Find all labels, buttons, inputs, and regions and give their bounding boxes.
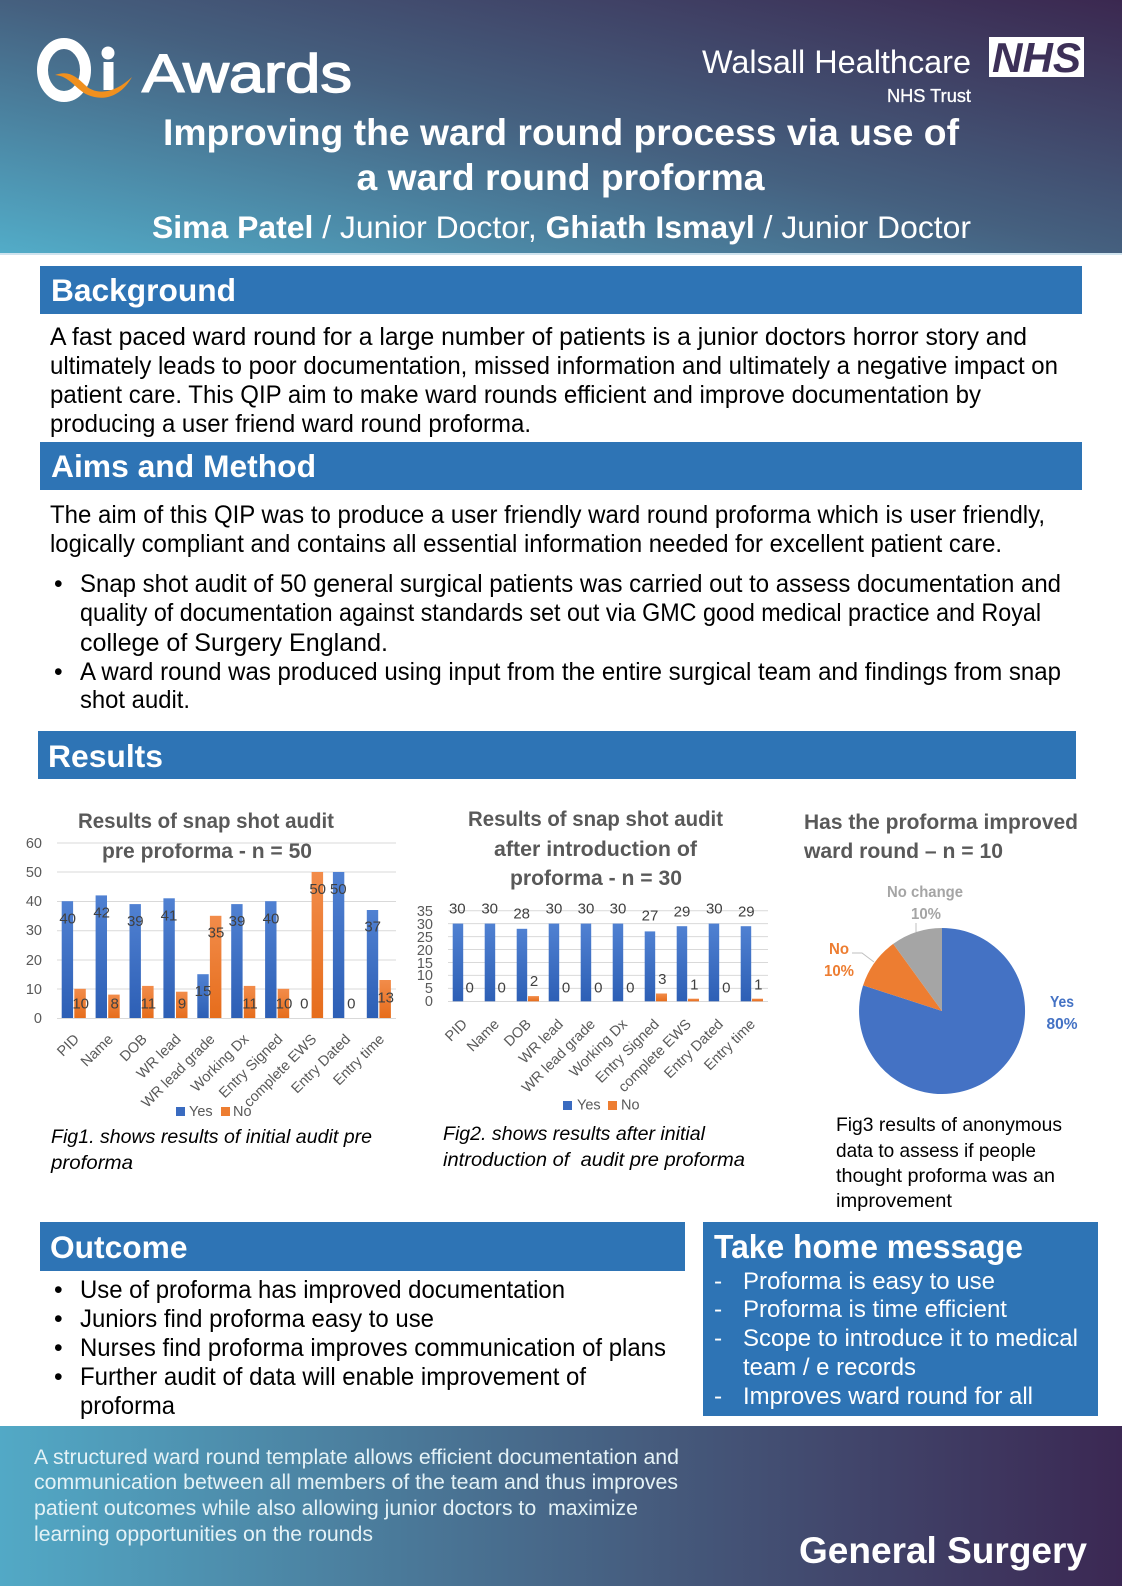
heading: take home message: Take home message [714,1228,1023,1265]
caption: fig 1: Fig1. shows results of initial audit pre [51,1126,372,1148]
caption: fig 3: improvement [836,1190,953,1212]
data labels: 0 [626,979,634,996]
data labels: 29 [738,904,755,921]
text: aims: The aim of this QIP was to produce a user friendly ward round proforma which is user friendly, [50,502,1045,529]
category labels: Name [78,1032,117,1070]
label: yes: Yes [1050,994,1074,1011]
chart title [468,808,723,890]
y axis labels [26,836,42,1027]
heading: background [40,266,1082,314]
bullet list: outcome [54,1277,666,1420]
chart title: Has the proforma improved [804,811,1078,834]
data labels: 2 [530,973,538,990]
y axis labels: 30 [417,917,433,933]
category labels: complete EWS [616,1017,695,1096]
title: a ward round proforma [356,156,765,198]
data labels: 8 [111,995,119,1012]
data labels: 41 [161,908,177,925]
bullet list: method: quality of documentation against standards set out via GMC good medical practice and Royal [80,600,1041,627]
bullet list: outcome: Juniors find proforma easy to use [80,1306,434,1333]
data labels [449,900,762,996]
bars: yes [62,872,378,1018]
data labels: 39 [229,913,245,930]
data labels: 35 [208,924,224,941]
y axis labels: 0 [34,1011,42,1027]
category labels: DOB [501,1017,535,1050]
data labels: 11 [141,995,156,1012]
footer banner [0,1426,1122,1586]
bullet list: outcome: • [54,1335,63,1362]
chart title: Results of snap shot audit [78,810,334,833]
label: yes: 80% [1046,1016,1078,1033]
text: background: patient care. This QIP aim to make ward rounds efficient and improve documentation by [50,382,982,409]
data labels: 3 [658,971,666,988]
text: background [50,324,1058,438]
bar chart: after proforma [417,808,768,1114]
caption: fig 3: data to assess if people [836,1140,1036,1162]
y axis labels: 20 [26,953,42,969]
caption: fig 1 [50,1126,372,1174]
caption: fig 3: Fig3 results of anonymous [836,1114,1062,1136]
data labels: 10 [276,995,292,1012]
list: take home points [714,1268,1078,1410]
data labels: 30 [578,900,594,917]
category labels: PID [442,1017,471,1045]
data labels: 29 [674,904,690,921]
logo: Walsall Healthcare NHS Trust: NHS [992,34,1081,81]
slice: no change 10% [893,928,942,1011]
bars: yes [453,924,751,1001]
chart title: proforma - n = 30 [510,867,682,890]
data labels: 0 [466,979,474,996]
heading: results [38,731,1076,779]
data labels: 30 [706,900,723,917]
bullet list: outcome: • [54,1306,63,1333]
bullet list: method: A ward round was produced using input from the entire surgical team and findings from snap [80,659,1061,686]
y axis labels: 5 [425,981,433,997]
heading: aims and method: Aims and Method [51,448,316,484]
category labels: Entry Signed [593,1017,663,1087]
bars: no [74,872,391,1018]
caption: fig 3: thought proforma was an [836,1165,1055,1187]
data labels: 30 [610,900,626,917]
bar chart: pre proforma [26,810,396,1120]
caption: fig 2: introduction of audit pre proforma [443,1149,745,1171]
category labels: Working Dx [188,1031,253,1096]
bullet list: method: college of Surgery England. [80,630,388,657]
footer conclusion text: A structured ward round template allows efficient documentation and [34,1445,679,1469]
label: yes [1046,994,1078,1033]
data labels: 1 [690,976,698,993]
data labels: 0 [722,979,730,996]
chart title [78,810,334,863]
chart title: ward round – n = 10 [803,840,1003,863]
text: background: ultimately leads to poor documentation, missed information and ultimately a negative impact on [50,353,1058,380]
logo: Walsall Healthcare NHS Trust: NHS Trust [887,86,971,106]
legend [176,1104,252,1120]
logo: Qi Awards [42,44,352,104]
title: Improving the ward round process via use of [163,111,960,153]
bullet list: outcome: Use of proforma has improved documentation [80,1277,565,1304]
category labels: complete EWS [241,1032,320,1111]
data labels: 0 [594,979,602,996]
y axis labels: 60 [26,836,42,852]
list: take home points: Scope to introduce it to medical [743,1325,1078,1352]
data labels: 37 [364,919,381,936]
data labels: 27 [642,908,658,925]
list: take home points: Improves ward round for all [743,1383,1033,1410]
chart title [803,811,1078,863]
y axis labels: 25 [417,930,433,946]
data labels: 40 [263,910,279,927]
caption: fig 2: Fig2. shows results after initial [443,1123,706,1145]
bullet list: outcome: Nurses find proforma improves communication of plans [80,1335,666,1362]
panel: outcome [40,1222,685,1420]
data labels [59,881,394,1012]
bullet list: method: shot audit. [80,687,190,714]
category labels: Entry time [701,1017,759,1074]
list: take home points: - [714,1268,722,1295]
authors: Sima Patel / Junior Doctor, Ghiath Ismayl / Junior Doctor [152,209,971,245]
category labels: DOB [117,1032,151,1065]
data labels: 50 [309,881,326,898]
y axis labels: 20 [417,943,433,959]
bullet list: outcome: proforma [80,1393,175,1420]
data labels: 10 [72,995,89,1012]
bullet list: method: • [54,571,63,598]
slice: yes 80% [859,928,1025,1094]
text: aims: logically compliant and contains all essential information needed for excellent patient care. [50,531,1002,558]
category labels [54,1031,388,1111]
label: no change: 10% [911,906,941,923]
list: take home points: Proforma is easy to use [743,1268,995,1295]
title [163,111,960,198]
category labels: Working Dx [567,1016,631,1081]
data labels: 40 [59,910,76,927]
data labels: 42 [93,904,110,921]
caption: fig 2 [443,1123,745,1171]
y axis labels: 50 [26,865,42,881]
data labels: 0 [347,995,355,1012]
text: background: producing a user friend ward round proforma. [50,411,531,438]
category labels [442,1016,759,1096]
footer conclusion text [34,1445,679,1546]
label: no: No [829,941,849,958]
data labels: 28 [513,905,530,922]
footer conclusion text: learning opportunities on the rounds [34,1522,373,1546]
legend: Yes [189,1104,213,1120]
y axis labels: 0 [425,994,433,1010]
caption: fig 1: proforma [50,1152,133,1174]
specialty label: General Surgery [799,1530,1087,1571]
bullet list: method: Snap shot audit of 50 general surgical patients was carried out to assess documentation and [80,571,1061,598]
data labels: 30 [546,900,562,917]
y axis labels [417,904,433,1010]
list: take home points: - [714,1383,722,1410]
header banner [0,0,1122,255]
logo: Qi Awards: Awards [142,44,352,104]
label: no [824,941,854,980]
category labels: WR lead [134,1032,185,1082]
heading: outcome: Outcome [50,1229,188,1265]
footer conclusion text: patient outcomes while also allowing junior doctors to maximize [34,1496,638,1520]
logo: Walsall Healthcare NHS Trust [702,34,1084,106]
chart title: pre proforma - n = 50 [102,840,312,863]
data labels: 39 [127,913,144,930]
text: background: A fast paced ward round for a large number of patients is a junior doctors horror story and [50,324,1027,351]
logo: Walsall Healthcare NHS Trust: Walsall Healthcare [702,44,971,80]
category labels: Entry Signed [216,1032,286,1102]
legend: No [621,1098,640,1114]
bullet list: outcome: Further audit of data will enable improvement of [80,1364,586,1391]
data labels: 0 [300,995,308,1012]
category labels: WR lead grade [139,1032,218,1111]
list: take home points: - [714,1325,722,1352]
list: take home points: - [714,1296,722,1323]
y axis labels: 35 [417,904,433,920]
data labels: 11 [242,995,258,1012]
list: take home points: Proforma is time efficient [743,1296,1007,1323]
panel: aims and method [40,442,1082,714]
footer conclusion text: communication between all members of the team and thus improves [34,1470,678,1494]
data labels: 15 [195,983,211,1000]
data labels: 30 [481,900,498,917]
category labels: Entry Dated [661,1017,727,1082]
heading: background: Background [51,272,236,308]
category labels: Entry time [330,1032,388,1089]
data labels: 0 [562,979,570,996]
label: no change [887,884,963,923]
slice: no 10% [863,944,942,1011]
legend [563,1098,640,1114]
y axis labels: 40 [26,894,42,910]
category labels: WR lead [516,1017,567,1067]
data labels: 1 [754,976,762,993]
data labels: 50 [330,881,347,898]
text: aims [50,502,1045,558]
panel: take home message [703,1222,1098,1416]
y axis labels: 30 [26,923,42,939]
caption: fig 3 [836,1114,1062,1212]
panel: background [40,266,1082,438]
legend: Yes [577,1098,601,1114]
heading: results: Results [48,738,163,774]
y axis labels: 15 [417,956,433,972]
legend: No [233,1104,252,1120]
data labels: 9 [178,995,186,1012]
data labels: 30 [449,900,466,917]
category labels: PID [54,1032,83,1060]
y axis labels: 10 [417,968,433,984]
data labels: 13 [377,989,394,1006]
heading: aims and method [40,442,1082,490]
chart title: after introduction of [494,838,698,861]
category labels: WR lead grade [519,1017,599,1096]
heading: outcome [40,1222,685,1271]
pie chart: has the proforma improved ward round [803,811,1078,1094]
bullet list: method: • [54,659,63,686]
chart title: Results of snap shot audit [468,808,723,831]
bars: no [528,994,763,1001]
bullet list: outcome: • [54,1364,63,1391]
bullet list: method [54,571,1061,714]
category labels: Entry Dated [289,1032,354,1097]
data labels: 0 [498,979,506,996]
label: no change: No change [887,884,963,901]
y axis labels: 10 [26,982,42,998]
category labels: Name [464,1017,503,1055]
list: take home points: team / e records [743,1354,916,1381]
bullet list: outcome: • [54,1277,63,1304]
label: no: 10% [824,963,854,980]
